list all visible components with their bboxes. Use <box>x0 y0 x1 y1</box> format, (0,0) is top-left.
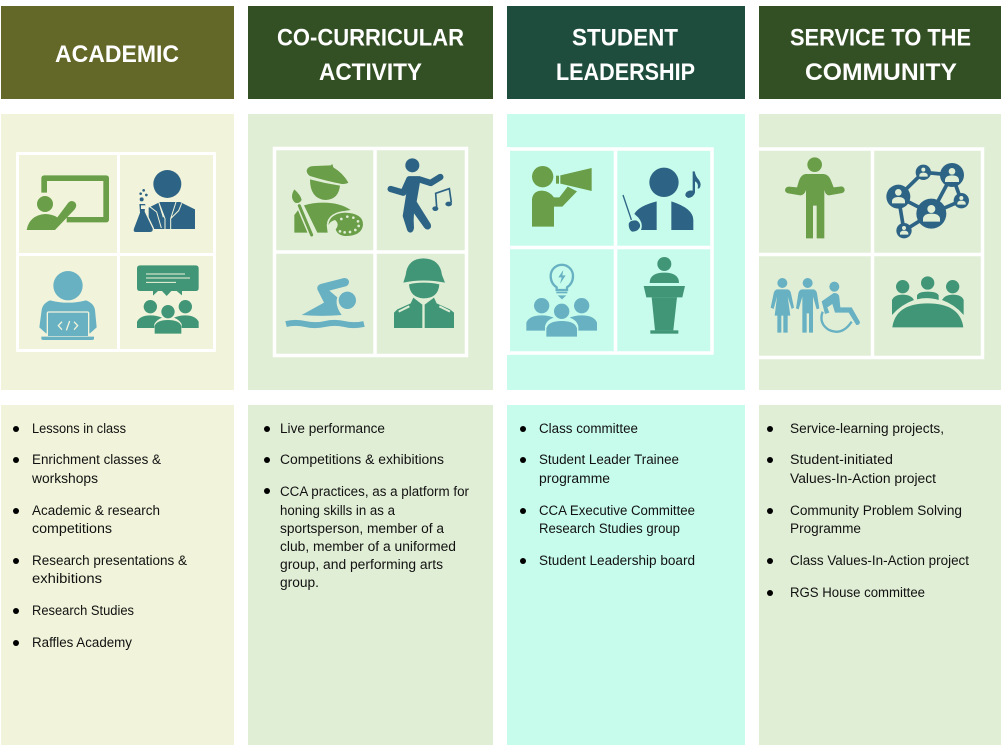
heading: service to the community: COMMUNITY <box>805 59 957 86</box>
icon: dancer with music note <box>391 158 452 233</box>
text block: academic list: workshops <box>31 471 98 486</box>
text block: academic list: Raffles Academy <box>32 635 132 650</box>
icon: swimmer <box>286 278 364 325</box>
heading: co-curricular activity: ACTIVITY <box>319 59 422 86</box>
text block: co-curricular list: CCA practices, as a platform for <box>280 484 469 499</box>
heading: student leadership: LEADERSHIP <box>556 59 695 86</box>
text block: community list: Community Problem Solving <box>790 503 962 518</box>
column: service to the community <box>759 6 1001 745</box>
text block: community list: RGS House committee <box>790 585 925 600</box>
text block: student leadership list: Student Leader Trainee <box>539 452 679 467</box>
icon: uniformed soldier <box>394 258 454 328</box>
panel: academic icons <box>1 114 234 390</box>
icon: standing person <box>785 157 845 238</box>
icon: artist with palette <box>292 164 364 237</box>
text block: community list: Values-In-Action project <box>790 471 936 486</box>
icon: scientist with flask <box>133 170 195 233</box>
text block: co-curricular list: club, member of a uniformed <box>280 539 456 554</box>
heading: academic <box>1 6 234 99</box>
heading: student leadership <box>507 6 745 99</box>
text block: student leadership list: programme <box>539 471 610 486</box>
text block: academic list: Enrichment classes & <box>32 452 161 467</box>
heading: academic: ACADEMIC <box>55 41 179 68</box>
text block: student leadership list: Class committee <box>539 421 638 436</box>
panel: student leadership icons <box>507 114 745 390</box>
icon: meeting around table <box>892 276 964 327</box>
heading: co-curricular activity <box>248 6 493 99</box>
text block: community list: Programme <box>790 521 861 536</box>
column: student leadership <box>507 6 745 745</box>
icon: team with idea bulb <box>526 265 597 337</box>
text block: student leadership list: Student Leadership board <box>539 553 695 568</box>
text block: student leadership list <box>507 405 745 745</box>
text block: student leadership list: CCA Executive Committee <box>539 503 695 518</box>
heading: co-curricular activity: CO-CURRICULAR <box>277 24 464 52</box>
icon: person with megaphone <box>532 166 592 227</box>
icon: speaker at podium <box>644 257 685 334</box>
heading: service to the community <box>759 6 1001 99</box>
text block: co-curricular list: group. <box>280 575 319 590</box>
panel: co-curricular icons <box>248 114 493 390</box>
text block: academic list: Lessons in class <box>32 421 126 436</box>
text block: community list: Class Values-In-Action project <box>790 553 969 568</box>
text block: academic list: competitions <box>32 521 112 536</box>
text block: co-curricular list: Live performance <box>280 421 385 436</box>
column: academic <box>1 6 234 745</box>
text block: co-curricular list: Competitions & exhibitions <box>280 452 444 467</box>
icon: music conductor <box>623 168 701 232</box>
text block: co-curricular list: sportsperson, member of a <box>280 521 444 536</box>
icon: teacher at board <box>27 175 109 230</box>
icon: group discussion <box>137 265 199 334</box>
text block: academic list <box>1 405 234 745</box>
panel: community icons <box>759 114 1001 390</box>
text block: academic list: Research Studies <box>32 603 134 618</box>
text block: academic list: Research presentations & <box>32 553 187 568</box>
icon: diverse people and wheelchair user <box>771 278 860 333</box>
text block: community list: Service-learning projects, <box>790 421 944 436</box>
text block: co-curricular list: honing skills in as a <box>280 503 395 518</box>
text block: community list: Student-initiated <box>790 452 893 467</box>
text block: co-curricular list <box>248 405 493 745</box>
text block: academic list: Academic & research <box>32 503 160 518</box>
text block: co-curricular list: group, and performing arts <box>280 557 443 572</box>
heading: student leadership: STUDENT <box>572 24 678 52</box>
text block: academic list: exhibitions <box>32 571 102 586</box>
icon: coder with laptop <box>39 271 97 340</box>
text block: community list <box>759 405 1001 745</box>
text block: student leadership list: Research Studies group <box>539 521 680 536</box>
column: co-curricular activity <box>248 6 493 745</box>
heading: service to the community: SERVICE TO THE <box>790 24 971 52</box>
icon: people network <box>886 163 969 238</box>
